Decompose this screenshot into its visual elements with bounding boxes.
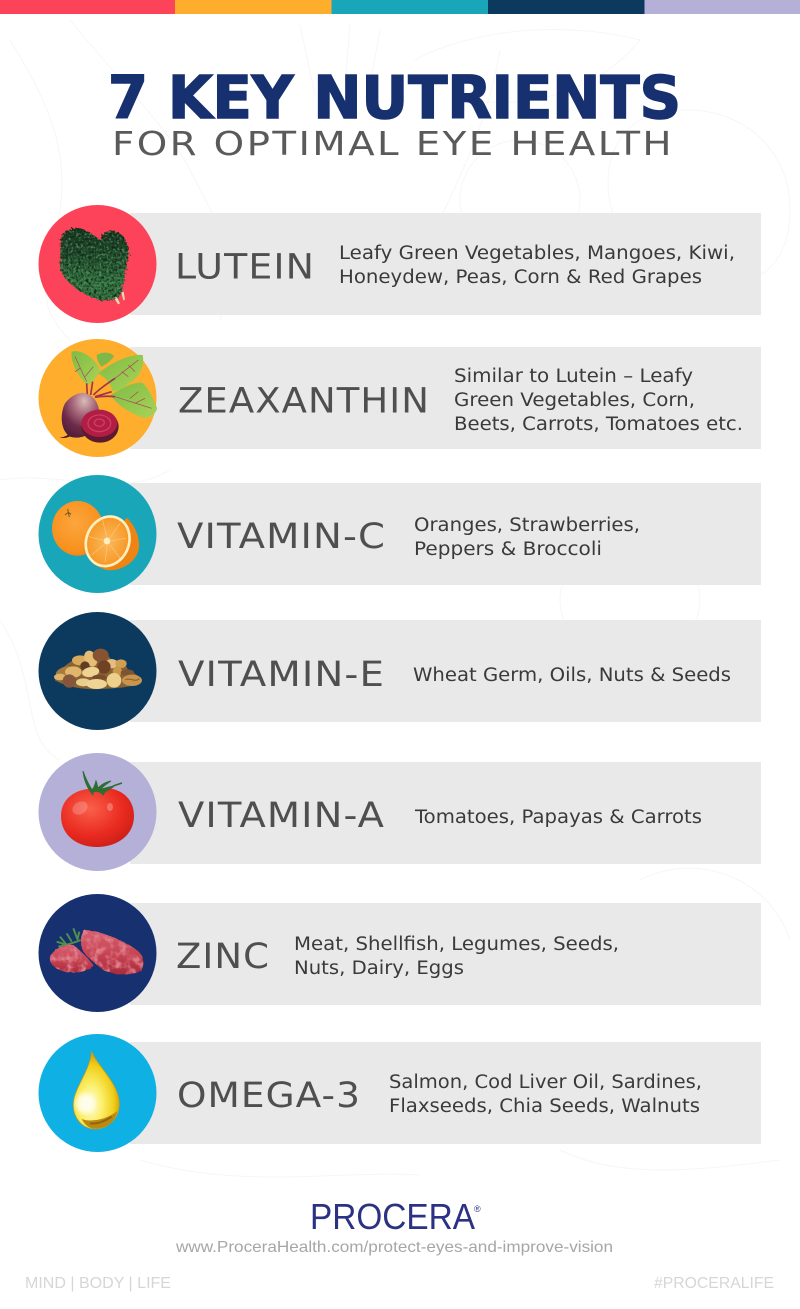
omega 3 bar: [130, 1042, 761, 1144]
vitamin a foods: Tomatoes, Papayas & Carrots: [414, 807, 702, 828]
zinc label: ZINC: [176, 937, 270, 977]
top colour strip: [0, 0, 800, 14]
panel: zeaxanthin: [38, 339, 761, 457]
vitamin c foods: [414, 515, 640, 560]
vitamin c foods: Oranges, Strawberries,: [414, 515, 640, 536]
icon: oil drop: [73, 1051, 119, 1129]
omega 3 foods: Salmon, Cod Liver Oil, Sardines,: [389, 1072, 702, 1093]
panel: lutein: [38, 205, 761, 323]
vitamin a circle: [38, 753, 156, 871]
panel: vitamin a: [38, 753, 761, 871]
vitamin e label: VITAMIN-E: [178, 655, 385, 695]
omega 3 foods: [389, 1072, 702, 1117]
logo: procera: ®: [474, 1204, 481, 1214]
hashtag: #PROCERALIFE: [654, 1275, 774, 1292]
omega 3 label: OMEGA-3: [177, 1076, 361, 1116]
zeaxanthin circle: [38, 339, 156, 457]
vitamin e bar: [130, 620, 761, 722]
lutein label: LUTEIN: [175, 248, 315, 288]
icon: orange: [52, 501, 139, 575]
panel: vitamin c: [38, 475, 761, 593]
vitamin c circle: [38, 475, 156, 593]
zinc foods: Nuts, Dairy, Eggs: [294, 958, 464, 979]
zinc foods: [294, 934, 619, 979]
zeaxanthin foods: [454, 366, 743, 435]
panel: vitamin e: [38, 612, 761, 730]
zeaxanthin bar: [130, 347, 761, 449]
vitamin e circle: [38, 612, 156, 730]
lutein bar: [130, 213, 761, 315]
icon: beet: [59, 351, 157, 443]
icon: meat: [50, 928, 143, 974]
vitamin c bar: [130, 483, 761, 585]
zeaxanthin foods: Similar to Lutein – Leafy: [454, 366, 693, 387]
vitamin c foods: Peppers & Broccoli: [414, 539, 602, 560]
vitamin a bar: [130, 762, 761, 864]
panel: zinc: [38, 894, 761, 1012]
title: 7 KEY NUTRIENTS: [108, 64, 681, 132]
zeaxanthin foods: Green Vegetables, Corn,: [454, 390, 695, 411]
zinc bar: [130, 903, 761, 1005]
icon: tomato: [61, 771, 134, 847]
icon: nuts: [54, 649, 142, 689]
vitamin a label: VITAMIN-A: [178, 796, 385, 836]
logo: procera: PROCERA: [310, 1196, 476, 1237]
zinc circle: [38, 894, 156, 1012]
subtitle: FOR OPTIMAL EYE HEALTH: [112, 125, 674, 163]
zeaxanthin label: ZEAXANTHIN: [178, 382, 430, 422]
lutein circle: [38, 205, 156, 323]
zeaxanthin foods: Beets, Carrots, Tomatoes etc.: [454, 414, 743, 435]
panel: omega 3: [38, 1034, 761, 1152]
vitamin e foods: Wheat Germ, Oils, Nuts & Seeds: [413, 665, 731, 686]
icon: kale: [60, 228, 129, 304]
vitamin c label: VITAMIN-C: [177, 517, 386, 557]
omega 3 foods: Flaxseeds, Chia Seeds, Walnuts: [389, 1096, 700, 1117]
lutein foods: Honeydew, Peas, Corn & Red Grapes: [339, 267, 702, 288]
website url: www.ProceraHealth.com/protect-eyes-and-improve-vision: [175, 1239, 613, 1256]
lutein foods: [339, 243, 735, 288]
lutein foods: Leafy Green Vegetables, Mangoes, Kiwi,: [339, 243, 735, 264]
zinc foods: Meat, Shellfish, Legumes, Seeds,: [294, 934, 619, 955]
omega 3 circle: [38, 1034, 156, 1152]
tagline: MIND | BODY | LIFE: [25, 1275, 171, 1292]
